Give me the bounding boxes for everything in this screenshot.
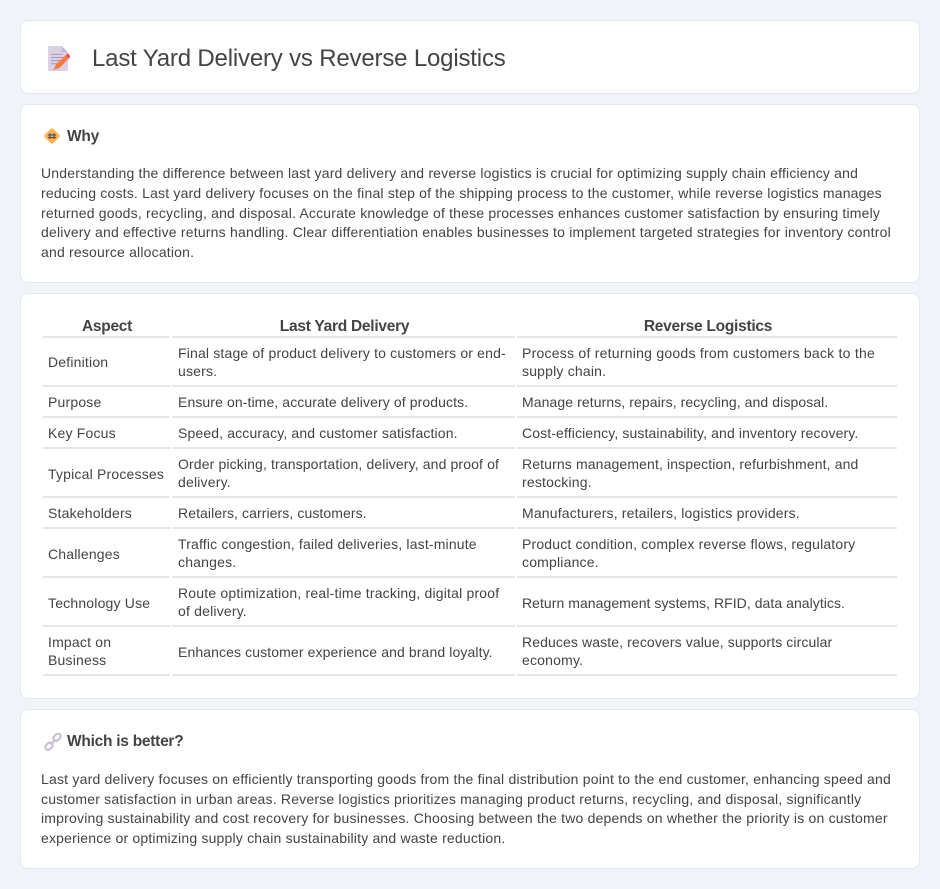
row: technology use: of delivery. (178, 603, 247, 619)
panel: which is better (20, 709, 920, 869)
row: purpose: Ensure on-time, accurate delivery of products. (178, 394, 468, 410)
row: key focus: Key Focus (48, 425, 116, 441)
row: challenges (48, 536, 856, 570)
row: impact on business: Enhances customer experience and brand loyalty. (178, 644, 493, 660)
why paragraph (41, 165, 891, 260)
row: definition: Final stage of product delivery to customers or end- (178, 345, 506, 361)
heading: why: Why (67, 128, 99, 145)
row: impact on business: Business (48, 652, 106, 668)
row: stakeholders (48, 505, 800, 521)
row: definition: Process of returning goods from customers back to the (522, 345, 875, 361)
row: purpose (48, 394, 828, 410)
icon: chain link (44, 733, 62, 751)
row: impact on business: Impact on (48, 634, 111, 650)
row: challenges: Challenges (48, 546, 120, 562)
row: challenges: changes. (178, 554, 236, 570)
which is better paragraph: experience or optimizing supply chain sustainability and waste reduction. (41, 830, 505, 846)
row: definition: users. (178, 363, 217, 379)
row: technology use: Return management systems, RFID, data analytics. (522, 595, 845, 611)
row: technology use: Technology Use (48, 595, 150, 611)
which is better paragraph: customer satisfaction in urban areas. Reverse logistics prioritizes managing product returns, recycling, and disposal, significantly (41, 791, 861, 807)
row: impact on business: Reduces waste, recovers value, supports circular (522, 634, 832, 650)
row: stakeholders: Stakeholders (48, 505, 132, 521)
row: stakeholders: Manufacturers, retailers, logistics providers. (522, 505, 800, 521)
title: Last Yard Delivery vs Reverse Logistics (92, 45, 506, 72)
row: typical processes: Returns management, inspection, refurbishment, and (522, 456, 858, 472)
why paragraph: and resource allocation. (41, 244, 194, 260)
row: typical processes: Order picking, transportation, delivery, and proof of (178, 456, 499, 472)
row: technology use: Route optimization, real-time tracking, digital proof (178, 585, 499, 601)
row: impact on business: economy. (522, 652, 583, 668)
panel: comparison table (20, 293, 920, 699)
row: stakeholders: Retailers, carriers, customers. (178, 505, 367, 521)
row: key focus (48, 425, 858, 441)
row: technology use (48, 585, 845, 619)
table header: Last Yard Delivery (280, 318, 409, 335)
row: challenges: compliance. (522, 554, 599, 570)
which is better paragraph: Last yard delivery focuses on efficiently transporting goods from the final distribution point to the end customer, enhancing speed and (41, 771, 891, 787)
why paragraph: Understanding the difference between last yard delivery and reverse logistics is crucial for optimizing supply chain efficiency and (41, 165, 858, 181)
which is better paragraph (41, 771, 891, 846)
row: typical processes: Typical Processes (48, 466, 164, 482)
row: key focus: Cost-efficiency, sustainability, and inventory recovery. (522, 425, 858, 441)
panel: why (20, 104, 920, 283)
icon: document with pencil (48, 46, 70, 71)
header card (20, 20, 920, 94)
row: definition (48, 345, 875, 379)
row: typical processes: delivery. (178, 474, 231, 490)
row: typical processes: restocking. (522, 474, 592, 490)
table header (82, 318, 772, 335)
row: purpose: Purpose (48, 394, 101, 410)
why paragraph: delivery and effective returns handling. Clear differentiation enables businesses to implement targeted strategies for inventory control (41, 224, 891, 240)
row: definition: Definition (48, 354, 108, 370)
table header: Reverse Logistics (644, 318, 772, 335)
why paragraph: reducing costs. Last yard delivery focuses on the final step of the shipping process to the customer, while reverse logistics manages (41, 185, 882, 201)
row: definition: supply chain. (522, 363, 606, 379)
table header: Aspect (82, 318, 132, 335)
row: purpose: Manage returns, repairs, recycling, and disposal. (522, 394, 828, 410)
which is better paragraph: improving sustainability and cost recovery for businesses. Choosing between the two depends on whether the priority is on customer (41, 810, 888, 826)
row: challenges: Traffic congestion, failed deliveries, last-minute (178, 536, 477, 552)
row: key focus: Speed, accuracy, and customer satisfaction. (178, 425, 458, 441)
row: typical processes (48, 456, 858, 490)
why paragraph: returned goods, recycling, and disposal. Accurate knowledge of these processes enhances customer satisfaction by ensuring timely (41, 205, 880, 221)
heading: which is better: Which is better? (67, 733, 183, 750)
row: impact on business (48, 634, 832, 668)
icon: warning diamond (44, 128, 60, 144)
row: challenges: Product condition, complex reverse flows, regulatory (522, 536, 855, 552)
